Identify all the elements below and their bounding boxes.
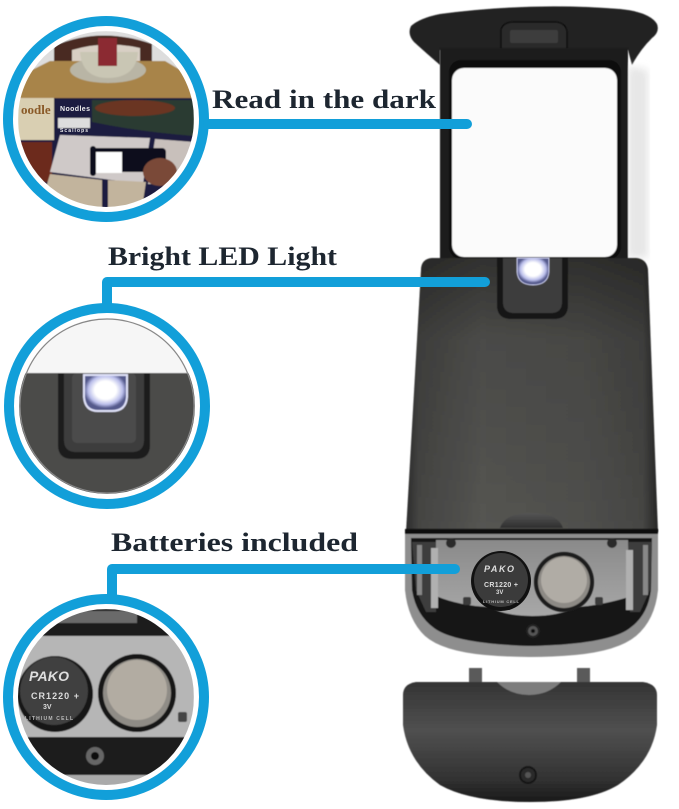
circular photo: batteries close-up: PAKO	[29, 668, 69, 684]
connector line	[208, 119, 467, 129]
coin battery: labelled face: LITHIUM CELL	[483, 599, 520, 604]
battery cover	[403, 668, 657, 802]
main body	[406, 258, 658, 532]
circular photo: batteries close-up	[8, 599, 204, 795]
circular photo: reading menu in the dark: oodle	[21, 102, 51, 117]
magnifier frame and lens	[440, 48, 648, 262]
circular photo: batteries close-up: 3V	[43, 704, 52, 711]
circular photo: batteries close-up: LITHIUM CELL	[25, 716, 73, 722]
label: Batteries included	[111, 528, 359, 557]
coin battery: labelled face: PAKO	[484, 564, 514, 574]
circular photo: batteries close-up: CR1220 +	[31, 691, 79, 701]
coin battery: labelled face	[471, 551, 531, 611]
coin battery: labelled face: CR1220 +	[484, 582, 518, 589]
LED light on body	[517, 258, 549, 285]
label: Bright LED Light	[108, 242, 337, 271]
circular photo: reading menu in the dark	[8, 21, 204, 217]
product: pocket magnifier	[403, 6, 658, 802]
coin battery: labelled face: 3V	[496, 590, 503, 596]
magnifier head cap	[410, 6, 658, 65]
connector line	[107, 282, 485, 305]
callout: batteries included	[8, 528, 455, 795]
callout: bright LED light	[9, 242, 485, 504]
circular photo: reading menu in the dark: Scallops	[60, 128, 88, 134]
connector line	[112, 569, 455, 596]
callout: read in the dark	[8, 21, 467, 217]
battery compartment	[405, 529, 658, 657]
circular photo: LED close-up	[9, 308, 205, 504]
label: Read in the dark	[212, 85, 437, 114]
circular photo: reading menu in the dark: Noodles	[60, 106, 90, 113]
coin battery: back face	[534, 552, 594, 612]
